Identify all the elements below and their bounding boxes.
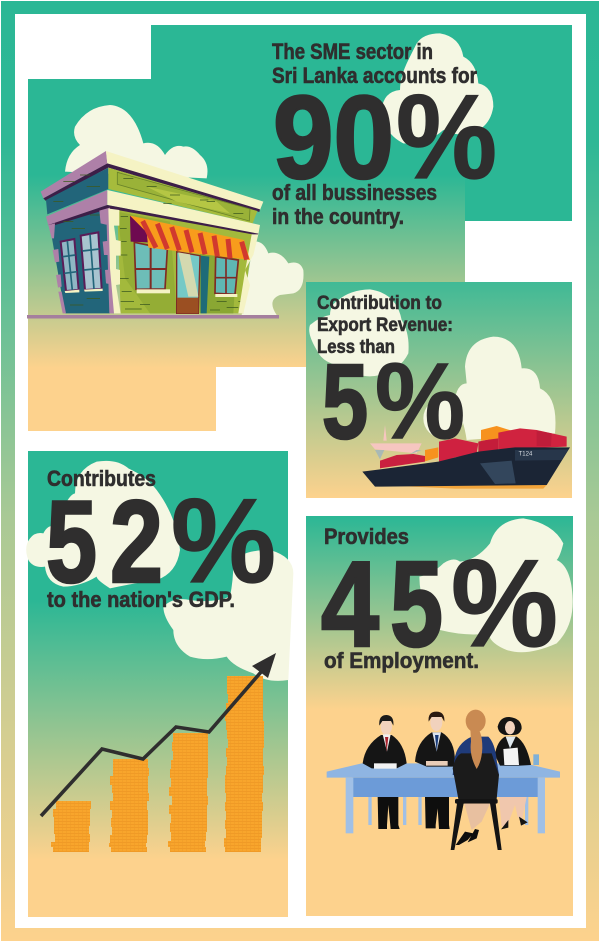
big number: 52 percent: 5 (46, 476, 97, 607)
text block: contributes: Contributes (47, 466, 156, 491)
man two (430, 714, 442, 731)
big number: 5 percent: 5 (322, 343, 368, 461)
text block: export revenue: Export Revenue: (317, 314, 453, 336)
quoins cream (107, 208, 121, 313)
illustration: interview table (327, 710, 560, 850)
text block: SME sector intro (272, 39, 477, 88)
text block: GDP: to the nation's GDP. (47, 587, 235, 612)
wall brick marks (53, 175, 243, 310)
text block: export revenue (317, 292, 453, 358)
candidate (453, 737, 499, 775)
coin stack three (168, 733, 208, 852)
clouds behind shop (65, 105, 304, 315)
big number: 90 percent (273, 70, 497, 204)
cloud behind 45 percent (419, 518, 573, 652)
big number: 45 percent: 5 (390, 536, 443, 672)
big number: 5 percent (322, 340, 465, 461)
text block: export revenue: Less than (317, 336, 395, 358)
big number: 90 percent: 90 (273, 72, 394, 204)
clouds behind GDP text (26, 461, 293, 681)
man one (381, 719, 392, 735)
text block: SME sector intro: The SME sector in (272, 39, 433, 64)
coin stack four (224, 676, 264, 852)
table (327, 763, 560, 778)
panel: export revenue (306, 282, 572, 498)
cloud behind 90 percent (382, 33, 493, 143)
icon: container ship (362, 425, 570, 489)
big number: 45 percent: % (451, 535, 558, 673)
text block: SME sector intro: Sri Lanka accounts for (272, 63, 477, 88)
woman right (498, 717, 522, 735)
big number: 90 percent: % (396, 70, 497, 204)
arrow: rising trend line (41, 653, 276, 816)
big number: 52 percent: 2 (110, 476, 163, 607)
big number: 45 percent (321, 535, 558, 673)
big number: 45 percent: 4 (321, 536, 379, 672)
coin stack two (109, 759, 149, 852)
awning (130, 216, 148, 242)
window front left (134, 242, 167, 289)
big number: 52 percent (46, 474, 276, 608)
panel: GDP contribution (26, 451, 293, 917)
door (177, 252, 200, 313)
text block: SME sector outro: in the country. (272, 204, 404, 229)
coin stack one (51, 801, 91, 852)
ground line (27, 315, 279, 318)
panel: employment (306, 516, 573, 916)
clouds behind export text (309, 289, 556, 440)
quoins purple left corner (48, 223, 55, 238)
text block: SME sector outro: of all bussinesses (272, 180, 437, 205)
text block: export revenue: Contribution to (317, 292, 442, 314)
big number: 5 percent: % (375, 340, 465, 461)
window front right (215, 257, 238, 294)
panel: SME share of businesses (27, 25, 572, 431)
text block: SME sector outro (272, 180, 437, 229)
big number: 52 percent: % (171, 474, 276, 608)
text block: provides: Provides (324, 524, 409, 549)
windows left wall (61, 239, 79, 291)
text block: employment: of Employment. (324, 648, 479, 673)
icon: container ship: T124 (519, 452, 533, 458)
bar chart: coin stacks (51, 676, 264, 852)
icon: shop building (41, 151, 263, 313)
